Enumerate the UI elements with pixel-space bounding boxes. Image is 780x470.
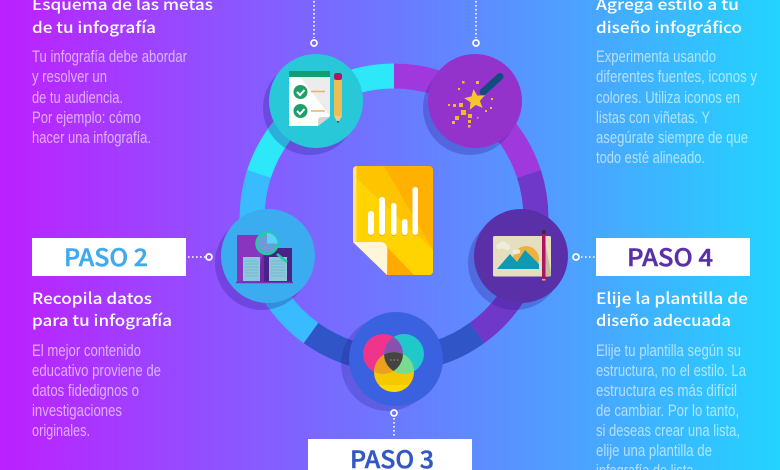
heading: step 4 xyxy=(596,287,748,331)
heading: step 4: diseño adecuada xyxy=(596,309,731,331)
label: PASO 3 xyxy=(308,439,472,470)
heading: step 1 xyxy=(32,0,213,38)
label: PASO 2 xyxy=(32,238,186,276)
heading: step 2: para tu infografía xyxy=(32,309,172,331)
icon: magic wand and star (step 5) xyxy=(423,54,522,155)
heading: step 4: Elije la plantilla de xyxy=(596,287,748,309)
text: step 5 body: colores. Utiliza iconos en xyxy=(596,89,740,107)
text: step 1 body xyxy=(32,48,187,147)
text: step 5 body: listas con viñetas. Y xyxy=(596,109,710,127)
panel: step 2 data xyxy=(32,238,212,440)
central document chart icon xyxy=(353,166,433,275)
text: step 4 body: estructura es más difícil xyxy=(596,382,737,400)
text: step 4 body: Elije tu plantilla según su xyxy=(596,342,741,360)
icon: venn diagram (step 3) xyxy=(341,312,443,411)
text: step 2 body: investigaciones xyxy=(32,402,122,420)
text: step 4 body: elije una plantilla de xyxy=(596,442,712,460)
panel: step 3 xyxy=(308,410,472,470)
label: PASO 2: PASO 2 xyxy=(64,238,148,273)
ring: five-segment process circle xyxy=(252,76,536,360)
text: step 5 body xyxy=(596,48,758,167)
connector: step 3 xyxy=(391,410,397,438)
icon: documents and magnifier (step 2) xyxy=(215,209,315,310)
label: PASO 4: PASO 4 xyxy=(627,238,713,273)
text: step 1 body: de tu audiencia. xyxy=(32,89,123,107)
text: step 4 body: si deseas crear una lista, xyxy=(596,422,740,440)
text: step 1 body: Por ejemplo: cómo xyxy=(32,109,141,127)
text: step 1 body: Tu infografía debe abordar xyxy=(32,48,187,66)
connector: step 4 xyxy=(573,254,596,260)
text: step 5 body: Experimenta usando xyxy=(596,48,716,66)
heading: step 2: Recopila datos xyxy=(32,287,152,309)
text: step 2 body xyxy=(32,342,161,440)
text: step 1 body: hacer una infografía. xyxy=(32,129,151,147)
text: step 5 body: todo esté alineado. xyxy=(596,149,705,167)
panel: step 1 goals xyxy=(32,0,213,147)
connector: step 5 xyxy=(473,1,479,46)
text: step 4 body xyxy=(596,342,747,470)
heading: step 5 xyxy=(596,0,742,38)
panel: step 4 template xyxy=(573,238,750,470)
text: step 4 body: de cambiar. Por lo tanto, xyxy=(596,402,739,420)
text: step 1 body: y resolver un xyxy=(32,68,107,86)
connector: step 1 xyxy=(311,1,317,46)
text: step 2 body: datos fidedignos o xyxy=(32,382,139,400)
icon: checklist and pencil (step 1) xyxy=(263,54,363,155)
heading: step 2 xyxy=(32,287,172,331)
text: step 2 body: educativo proviene de xyxy=(32,362,161,380)
text: step 4 body: estructura, no el estilo. La xyxy=(596,362,747,380)
heading: step 5: diseño infográfico xyxy=(596,16,742,38)
connector: step 2 xyxy=(188,254,212,260)
text: step 2 body: originales. xyxy=(32,422,90,440)
heading: step 1: de tu infografía xyxy=(32,16,156,38)
icon: landscape picture (step 4) xyxy=(468,209,568,310)
label: PASO 4 xyxy=(596,238,750,276)
text: step 2 body: El mejor contenido xyxy=(32,342,141,360)
panel: step 5 style xyxy=(596,0,758,167)
